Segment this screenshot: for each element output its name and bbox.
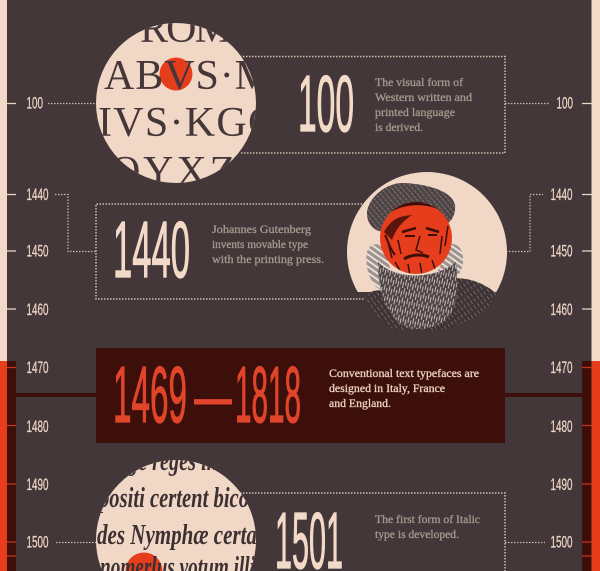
description: Conventional text typefaces are	[329, 368, 479, 380]
big year range: 1469	[113, 350, 187, 439]
red face circle	[380, 202, 452, 274]
description	[375, 77, 472, 134]
right year labels: 1450	[550, 242, 572, 260]
left year labels: 1480	[26, 417, 48, 436]
panel outline	[240, 56, 505, 153]
description	[375, 514, 480, 541]
right year labels	[550, 94, 573, 552]
red dot	[126, 552, 162, 571]
panel: year 1501	[240, 493, 505, 571]
icon: roman letters circle: ABVS·M	[104, 53, 272, 99]
left year labels	[26, 94, 48, 552]
left year labels: 1440	[26, 185, 48, 204]
icon: italic letters circle: des Nymphæ certa	[97, 519, 257, 551]
panel: year 1440: 1440	[113, 205, 190, 294]
description	[329, 368, 479, 410]
description: printed language	[375, 107, 455, 119]
connector line across band	[16, 393, 582, 397]
description: with the printing press.	[212, 254, 324, 266]
icon: Gutenberg portrait	[347, 172, 507, 330]
description: The visual form of	[375, 77, 463, 89]
right timeline bar	[582, 0, 600, 571]
red dot	[160, 58, 192, 90]
description: invents movable type	[212, 239, 308, 251]
description: is derived.	[375, 122, 423, 134]
description: designed in Italy, France	[329, 383, 445, 395]
right year labels: 1490	[550, 475, 572, 494]
left timeline bar	[0, 0, 16, 571]
description: Johannes Gutenberg	[212, 224, 311, 236]
description: and England.	[329, 398, 391, 410]
icon: roman letters circle: QYXZI	[110, 149, 252, 195]
right year labels: 1440	[550, 185, 572, 204]
panel: 1469-1818 band	[96, 348, 505, 443]
description: type is developed.	[375, 529, 459, 541]
panel: 1469-1818 band: 1818	[235, 350, 301, 439]
left year labels: 1470	[26, 358, 48, 377]
description	[212, 224, 324, 266]
right year labels: 1470	[550, 358, 572, 377]
right year labels: 100	[556, 94, 573, 112]
description: The first form of Italic	[375, 514, 480, 526]
right year labels: 1480	[550, 417, 572, 436]
panel: year 100	[240, 56, 505, 153]
icon: roman letters circle: IVS·KGC	[98, 100, 276, 146]
panel outline	[240, 493, 505, 571]
description: Western written and	[375, 92, 472, 104]
left year labels: 1490	[26, 475, 48, 494]
fur hat	[367, 183, 455, 232]
right year labels: 1500	[550, 532, 572, 552]
left year labels: 1500	[26, 532, 48, 552]
icon: roman letters circle: ROM	[140, 6, 232, 52]
icon: italic letters circle	[96, 460, 256, 571]
icon: italic letters circle: ge reges in	[127, 445, 218, 477]
big year range: —	[194, 350, 232, 439]
panel: year 100: 100	[298, 59, 354, 148]
panel outline	[96, 204, 365, 299]
left year labels: 1460	[26, 300, 48, 319]
left year labels: 100	[26, 94, 43, 112]
beard	[378, 262, 457, 329]
icon: italic letters circle: positi certent bico	[97, 482, 249, 514]
face engraving	[384, 202, 449, 274]
ruff	[366, 244, 463, 290]
left year labels: 1450	[26, 242, 48, 260]
icon: roman letters circle	[96, 23, 256, 183]
dotted connectors	[48, 104, 549, 542]
coat	[365, 278, 497, 330]
panel: year 1440	[96, 204, 365, 299]
right year labels: 1460	[550, 300, 572, 319]
